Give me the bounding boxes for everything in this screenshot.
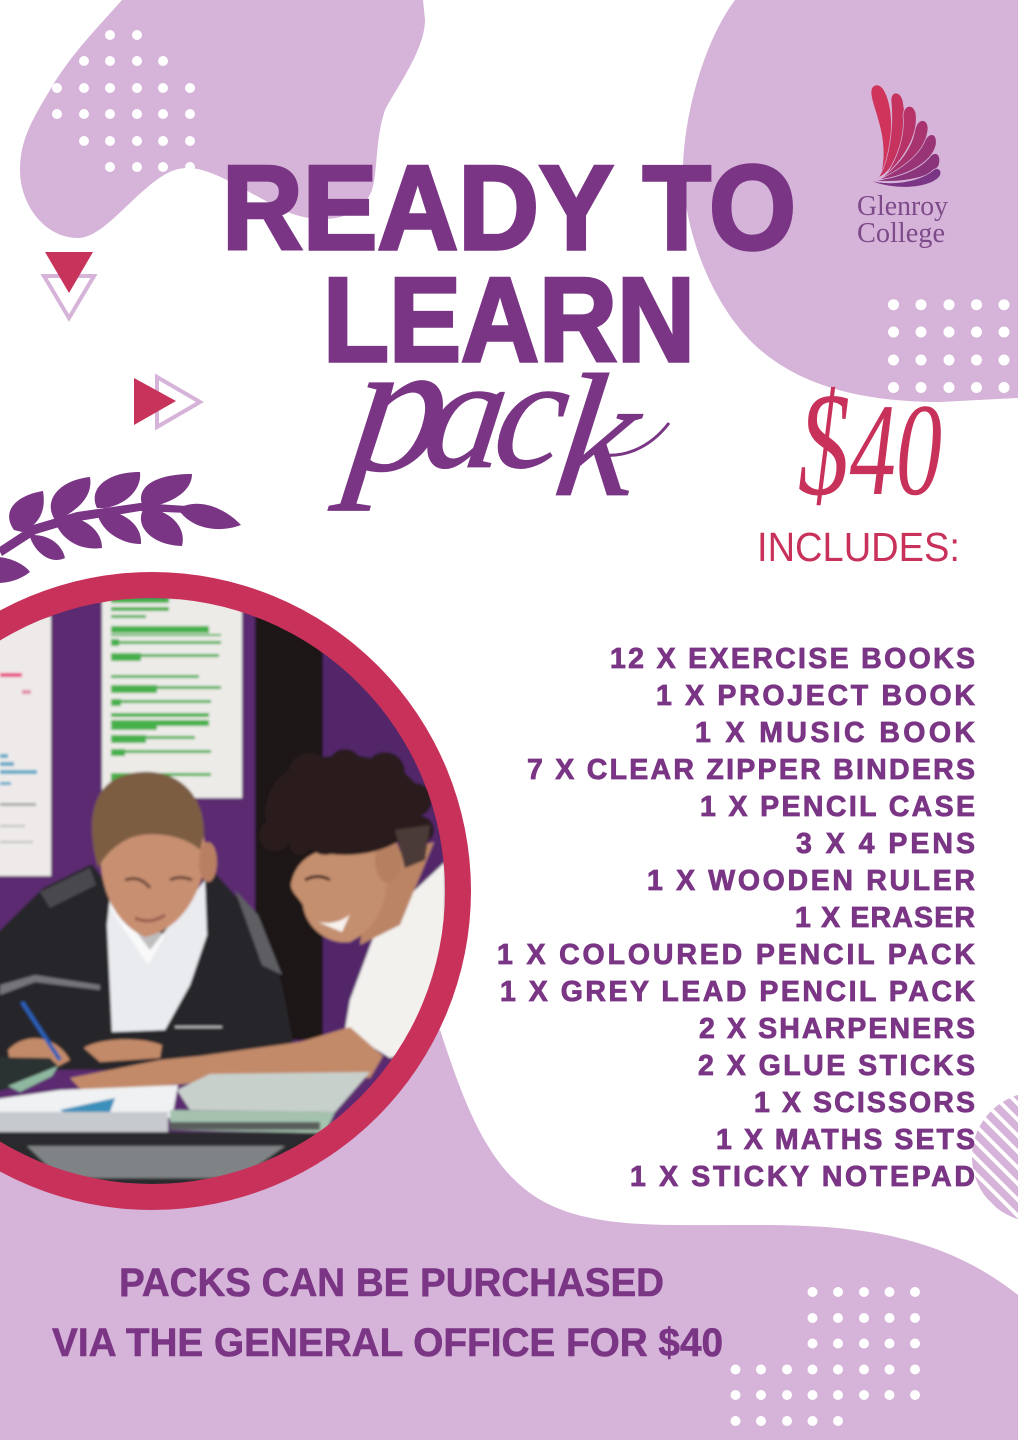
- list: pack contents: 7 X CLEAR ZIPPER BINDERS: [527, 754, 975, 786]
- blob: top left: [20, 0, 425, 238]
- list: pack contents: 1 X MUSIC BOOK: [695, 717, 975, 749]
- table and books: [0, 1070, 371, 1184]
- list: pack contents: 1 X PENCIL CASE: [700, 791, 975, 823]
- title: ready to learn: [222, 141, 796, 387]
- script heading: pack: k: [546, 339, 655, 534]
- logo: Glenroy College: College: [857, 218, 945, 249]
- script heading: pack: [324, 302, 669, 534]
- blob: bottom: [0, 1030, 1018, 1440]
- poster left: [0, 616, 51, 876]
- list: pack contents: 2 X SHARPENERS: [699, 1013, 975, 1045]
- list: pack contents: 1 X GREY LEAD PENCIL PACK: [500, 976, 975, 1008]
- photo: two students in circular crimson frame: [0, 572, 471, 1210]
- icon: wing: [868, 85, 941, 187]
- list: pack contents: 1 X PROJECT BOOK: [656, 680, 975, 712]
- heading: includes: INCLUDES:: [757, 524, 960, 570]
- list: pack contents: 1 X ERASER: [795, 902, 975, 934]
- title: ready to learn: READY TO: [222, 141, 796, 275]
- list: pack contents: 1 X COLOURED PENCIL PACK: [497, 939, 975, 971]
- logo: Glenroy College: Glenroy: [857, 191, 948, 222]
- arm and hands: [8, 1027, 383, 1094]
- list: pack contents: 1 X SCISSORS: [754, 1087, 975, 1119]
- script heading: pack: a: [415, 325, 520, 502]
- title: ready to learn: LEARN: [323, 253, 695, 387]
- footer: purchase note: VIA THE GENERAL OFFICE FOR $40: [52, 1321, 723, 1365]
- price: $40: $40: [798, 363, 942, 527]
- icon: triangles down: [44, 252, 94, 318]
- script heading: pack: c: [485, 325, 581, 502]
- pen: [22, 1002, 60, 1060]
- pencil case: [0, 1057, 58, 1093]
- list: pack contents: 12 X EXERCISE BOOKS: [610, 643, 975, 675]
- list: pack contents: [497, 643, 975, 1193]
- list: pack contents: 1 X MATHS SETS: [716, 1124, 975, 1156]
- footer: purchase note: [52, 1261, 723, 1365]
- icon: leaf branch: [0, 472, 241, 583]
- footer: purchase note: PACKS CAN BE PURCHASED: [119, 1261, 664, 1305]
- list: pack contents: 2 X GLUE STICKS: [698, 1050, 975, 1082]
- icon: triangles right: [134, 377, 200, 427]
- right boy: [259, 749, 445, 1058]
- logo: Glenroy College: [857, 85, 948, 249]
- left boy: [0, 772, 293, 1070]
- blob: top right: [683, 0, 1018, 402]
- script heading: pack: p: [327, 302, 463, 512]
- list: pack contents: 1 X WOODEN RULER: [647, 865, 975, 897]
- list: pack contents: 1 X STICKY NOTEPAD: [630, 1161, 975, 1193]
- list: pack contents: 3 X 4 PENS: [796, 828, 975, 860]
- striped circle: [972, 1095, 1018, 1220]
- poster green: [102, 598, 242, 798]
